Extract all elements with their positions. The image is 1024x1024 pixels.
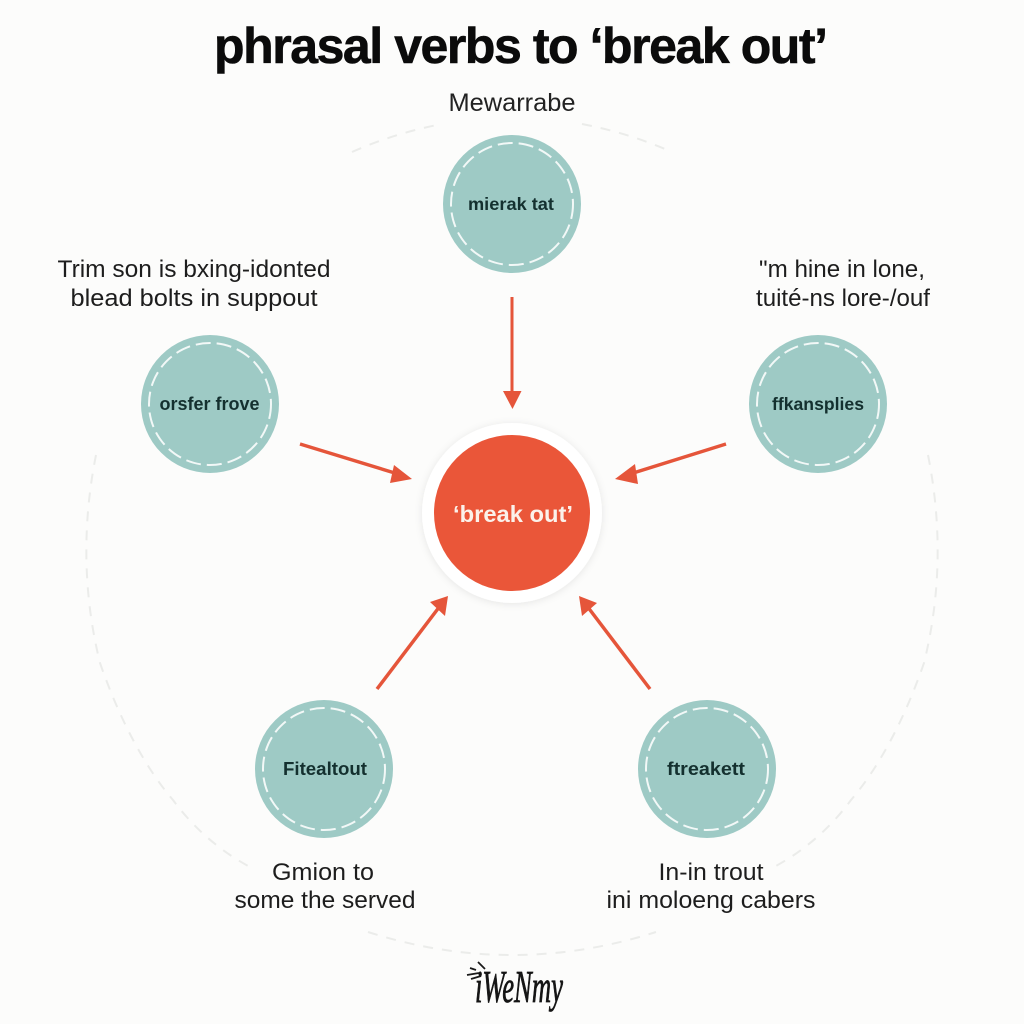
- text: right label: "m hine in lone,: [759, 256, 925, 283]
- text: bottom left label: some the served: [234, 887, 416, 914]
- text: bottom left label: [234, 859, 416, 914]
- node: left: orsfer frove: [160, 394, 260, 414]
- node: bottom right: ftreakett: [667, 759, 745, 779]
- text: bottom right label: In-in trout: [658, 859, 764, 886]
- node: left: [141, 335, 279, 473]
- text: left label: blead bolts in suppout: [70, 285, 318, 312]
- arrow: left: [300, 444, 412, 483]
- logo: [467, 961, 563, 1012]
- text: bottom left label: Gmion to: [272, 859, 374, 886]
- node: bottom right: [638, 700, 776, 838]
- text: bottom right label: ini moloeng cabers: [606, 887, 816, 914]
- center node: break out: ‘break out’: [453, 501, 573, 527]
- text: right label: tuité-ns lore-/ouf: [756, 285, 930, 312]
- arrow: bottom right: [579, 596, 650, 689]
- logo: iWeNmy: [475, 961, 563, 1012]
- text: right label: [756, 256, 930, 312]
- node: right: [749, 335, 887, 473]
- title: phrasal verbs to ‘break out’: [214, 18, 828, 74]
- arrow: top: [503, 297, 522, 409]
- text: left label: Trim son is bxing-idonted: [58, 256, 330, 283]
- text: top label: Mewarrabe: [448, 89, 576, 117]
- center node: break out: [422, 423, 602, 603]
- arrow: bottom left: [377, 596, 448, 689]
- text: bottom right label: [606, 859, 816, 914]
- text: left label: [58, 256, 330, 312]
- node: right: ffkansplies: [772, 394, 864, 414]
- node: bottom left: [255, 700, 393, 838]
- node: bottom left: Fitealtout: [283, 759, 367, 779]
- arrow: right: [615, 444, 726, 484]
- node: top: [443, 135, 581, 273]
- node: top: mierak tat: [468, 194, 554, 214]
